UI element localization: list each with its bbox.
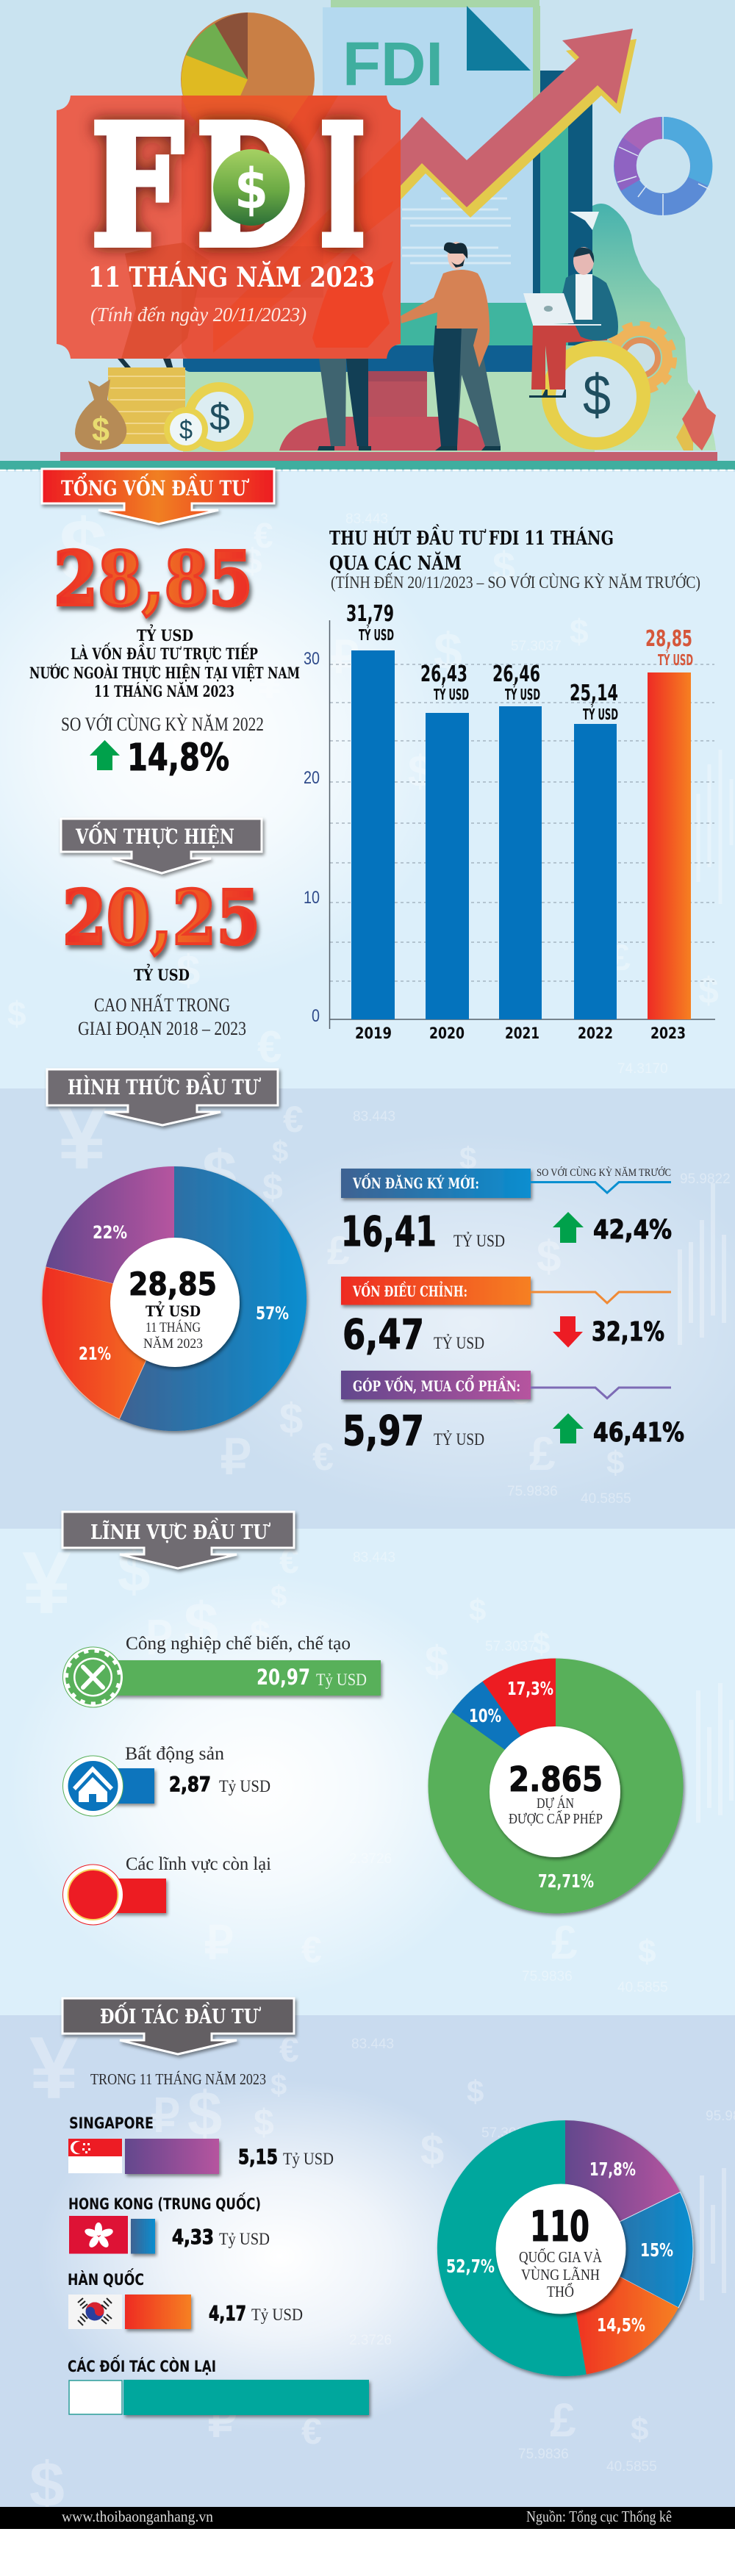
text block: total capital description: LÀ VỐN ĐẦU TƯ TRỰC TIẾP: [71, 643, 258, 663]
panel: new registered capital: [341, 1166, 672, 1256]
bar: manufacturing: [63, 1634, 381, 1707]
bar 2020: TỶ USD: [434, 685, 469, 703]
bar: manufacturing: 20,97: [257, 1665, 310, 1690]
panel: section 3 background: €: [279, 1542, 299, 1581]
panel: section 4 background: $: [420, 2126, 444, 2174]
panel: section 1 background: $: [698, 970, 719, 1011]
panel: capital contribution: [341, 1371, 684, 1455]
heading: chart title: THU HÚT ĐẦU TƯ FDI 11 THÁNG: [329, 524, 614, 550]
donut chart: investment forms: 22%: [93, 1222, 127, 1243]
panel: section 1 background: €: [257, 1022, 282, 1072]
ribbon: VỐN THỰC HIỆN: VỐN THỰC HIỆN: [75, 822, 234, 849]
heading: chart title: [329, 524, 700, 592]
icon: red circle: [63, 1865, 123, 1925]
text block: total capital description: [29, 624, 300, 735]
donut centre: 110: [530, 2203, 589, 2251]
bar: Hong Kong: Tỷ USD: [219, 2230, 270, 2248]
panel: section 1 background: 83.443: [345, 512, 388, 527]
icon: flag of Singapore: [68, 2139, 122, 2173]
ribbon: LĨNH VỰC ĐẦU TƯ: [62, 1512, 294, 1568]
icon: person partly hidden by title: [118, 358, 371, 451]
panel: section 3 background: $: [184, 1590, 218, 1660]
icon: house: [63, 1756, 123, 1816]
panel: section 1 background: $: [7, 994, 26, 1033]
bar 2020: 26,43: [420, 661, 467, 687]
bar: manufacturing: Công nghiệp chế biến, chế tạo: [126, 1634, 351, 1654]
panel: section 2 background: 83.443: [353, 1109, 395, 1124]
slice: manufacturing 72,71%: [428, 1658, 684, 1914]
panel: capital contribution: TỶ USD: [434, 1430, 484, 1449]
bar: Singapore: Tỷ USD: [283, 2150, 334, 2168]
panel: section 1 background: $: [408, 747, 432, 796]
icon: money bag and coins: $: [92, 410, 110, 448]
panel: new registered capital: TỶ USD: [453, 1232, 505, 1250]
panel: section 4 background: 75.9836: [518, 2447, 569, 2462]
text block: realized capital description: GIAI ĐOẠN 2018 – 2023: [78, 1018, 246, 1039]
panel: new registered capital: SO VỚI CÙNG KỲ NĂM TRƯỚC: [537, 1166, 671, 1179]
panel: section 4 background: $: [467, 2074, 484, 2109]
panel: section 3 background: $: [425, 1637, 448, 1685]
slice: other 17,3%: [482, 1658, 556, 1786]
y axis labels: 30: [304, 649, 320, 669]
donut centre: 28,85: [129, 1266, 217, 1303]
bar: Hong Kong: 4,33: [172, 2225, 214, 2249]
panel: section 4 background: ₽: [208, 2396, 237, 2447]
icon: flag of Hong Kong: [69, 2216, 128, 2253]
panel: section 1 background: $: [243, 542, 262, 581]
panel: section 4 background: $: [29, 2450, 65, 2520]
donut chart: projects by sector: 17,3%: [507, 1678, 553, 1699]
donut centre: [495, 2184, 626, 2314]
icon: standing man: [401, 242, 501, 451]
donut chart: projects by sector: 72,71%: [538, 1870, 594, 1892]
icon: green dollar coin: $: [234, 156, 268, 221]
ribbon: HÌNH THỨC ĐẦU TƯ: HÌNH THỨC ĐẦU TƯ: [68, 1072, 261, 1099]
donut centre: THỔ: [547, 2283, 574, 2300]
bar 2023: TỶ USD: [658, 650, 693, 669]
bar 2023: [645, 626, 693, 1042]
donut chart: investment forms: 57%: [256, 1303, 289, 1324]
donut centre: [490, 1726, 620, 1857]
panel: section 4 background: $: [254, 2102, 274, 2143]
bar: other sectors: Các lĩnh vực còn lại: [126, 1854, 271, 1874]
bar: real estate: Bất động sản: [125, 1744, 225, 1764]
panel: section 2 background: 40.5855: [581, 1491, 631, 1507]
icon: donut chart illustration: [617, 117, 710, 216]
bar: other partners: CÁC ĐỐI TÁC CÒN LẠI: [68, 2355, 216, 2375]
panel: section 1 background: $: [59, 501, 108, 600]
bar: real estate: Tỷ USD: [219, 1777, 270, 1795]
text block: total capital description: NƯỚC NGOÀI THỰC HIỆN TẠI VIỆT NAM: [29, 664, 300, 682]
panel: section 2 background: $: [202, 1138, 237, 1208]
donut centre: QUỐC GIA VÀ: [519, 2248, 603, 2266]
donut chart: investment forms: 21%: [79, 1343, 111, 1364]
panel: section 1 background: €: [254, 517, 273, 556]
heading: FDI: D: [196, 87, 308, 284]
panel: new registered capital: VỐN ĐĂNG KÝ MỚI:: [352, 1172, 479, 1192]
bar: South Korea: HÀN QUỐC: [68, 2268, 144, 2289]
ribbon: HÌNH THỨC ĐẦU TƯ: [47, 1069, 278, 1125]
panel: section 2 background: €: [507, 1364, 531, 1413]
bar 2019: TỶ USD: [359, 625, 394, 644]
panel: adjusted capital: [341, 1277, 671, 1359]
ribbon: TỔNG VỐN ĐẦU TƯ: TỔNG VỐN ĐẦU TƯ: [61, 472, 250, 501]
panel: section 2 background: $: [279, 1395, 303, 1443]
bar: Singapore: 5,15: [238, 2145, 278, 2169]
donut chart: partners: 14,5%: [597, 2314, 645, 2336]
panel: section 4 background: [0, 2015, 735, 2520]
bar: South Korea: 4,17: [209, 2301, 246, 2325]
footer: Nguồn: Tổng cục Thống kê: [526, 2508, 672, 2525]
panel: section 2 background: $: [537, 1232, 561, 1281]
panel: section 2 background: $: [272, 1135, 288, 1168]
slice: Singapore 17,8%: [565, 2120, 680, 2248]
panel: section 2 background: [0, 1088, 735, 1529]
panel: new registered capital: 16,41: [341, 1208, 437, 1256]
slice: others 52,7%: [437, 2120, 587, 2376]
panel: section 3 background: $: [270, 1580, 287, 1612]
panel: section 3 background: 57.3037: [485, 1639, 536, 1654]
panel: section 4 background: $: [631, 2411, 648, 2447]
icon: big dollar coin: $: [583, 362, 611, 427]
icon: money bag and coins: $: [179, 415, 193, 445]
panel: section 3 background: 83.443: [353, 1550, 395, 1565]
bar 2020: [420, 661, 469, 1042]
bar 2023: 2023: [650, 1025, 686, 1042]
panel: section 4 background: €: [279, 2031, 299, 2070]
icon: sitting person with laptop: [523, 247, 618, 398]
panel: adjusted capital: 32,1%: [592, 1317, 664, 1347]
footer: www.thoibaonganhang.vn: [62, 2508, 213, 2525]
icon: green dollar coin: [213, 149, 290, 226]
panel: section 1 background: $: [570, 612, 589, 650]
y axis labels: 20: [304, 768, 320, 788]
bar 2022: TỶ USD: [583, 705, 618, 723]
icon: green up arrow: [90, 740, 120, 770]
heading: FDI: F: [90, 87, 184, 284]
bar: Singapore: [68, 2114, 334, 2174]
panel: section 4 background: £: [550, 2394, 576, 2447]
panel: section 2 background: $: [606, 1445, 624, 1481]
ribbon: ĐỐI TÁC ĐẦU TƯ: [62, 1998, 294, 2054]
heading: chart title: QUA CÁC NĂM: [329, 551, 462, 575]
bar 2022: 2022: [578, 1025, 613, 1042]
panel: section 3 background: ₽: [143, 1613, 172, 1664]
bar: Hong Kong: HONG KONG (TRUNG QUỐC): [68, 2192, 261, 2213]
bar: South Korea: [68, 2268, 303, 2329]
panel: section 2 background: €: [283, 1099, 304, 1140]
big number: 28,85: 28,85: [54, 535, 253, 623]
ribbon: VỐN THỰC HIỆN: [61, 819, 262, 873]
date note: (Tính đến ngày 20/11/2023): [90, 304, 306, 326]
panel: adjusted capital: TỶ USD: [434, 1334, 484, 1352]
subtitle: 11 THÁNG NĂM 2023: [88, 261, 375, 293]
panel: capital contribution: GÓP VỐN, MUA CỔ PHẦN:: [353, 1374, 520, 1395]
slice: Hong Kong 15%: [565, 2192, 693, 2308]
panel: section 3 background: $: [533, 1626, 550, 1660]
donut centre: [110, 1238, 240, 1367]
donut centre: DỰ ÁN: [537, 1795, 574, 1812]
big number: 20,25: 20,25: [62, 874, 260, 961]
panel: section 3 background: [0, 1529, 735, 2015]
panel: section 1 background: $: [434, 623, 462, 680]
panel: section 2 background: €: [312, 1436, 334, 1479]
panel: section 3 background: $: [250, 1613, 270, 1654]
bar 2022: 25,14: [570, 681, 618, 706]
ground bar: [0, 452, 735, 470]
icon: paper plane: [570, 212, 599, 230]
panel: section 4 background: 57.3037: [481, 2125, 532, 2141]
donut chart: investment forms: [42, 1166, 306, 1431]
bar: manufacturing: Tỷ USD: [316, 1671, 367, 1689]
ribbon: TỔNG VỐN ĐẦU TƯ: [42, 469, 274, 524]
heading: FDI: [90, 87, 366, 284]
panel: section 2 background: ¥: [57, 1089, 107, 1188]
donut chart: partners: 17,8%: [589, 2159, 636, 2180]
slice: South Korea 14,5%: [565, 2248, 678, 2375]
text block: realized capital description: TỶ USD: [134, 964, 190, 984]
icon: big dollar coin: [542, 341, 650, 450]
donut chart: projects by sector: 10%: [469, 1705, 501, 1726]
panel: section 2 background: $: [459, 1141, 476, 1175]
donut chart: partners: 15%: [640, 2239, 673, 2261]
panel: section 2 background: 75.9836: [507, 1484, 558, 1499]
bar 2022: [570, 681, 618, 1042]
icon: computer monitor: [183, 71, 592, 451]
panel: section 2 background: £: [529, 1427, 556, 1480]
document title: FDI: [343, 29, 443, 98]
bar: other partners: [68, 2355, 369, 2415]
bar: other sectors: [63, 1854, 271, 1925]
slice: new registered 57%: [119, 1166, 306, 1431]
slice: real estate 10%: [452, 1682, 556, 1786]
bar 2021: 2021: [505, 1025, 539, 1042]
panel: section 3 background: $: [638, 1934, 656, 1970]
text block: total capital description: 11 THÁNG NĂM 2023: [94, 682, 234, 700]
footer: [0, 2507, 735, 2529]
donut chart: projects by sector: [428, 1658, 684, 1914]
donut centre: 2.865: [509, 1759, 603, 1799]
bar: Hong Kong: [68, 2192, 270, 2253]
panel: section 1 background: [0, 472, 735, 1088]
panel: adjusted capital: VỐN ĐIỀU CHỈNH:: [352, 1280, 467, 1300]
ribbon: ĐỐI TÁC ĐẦU TƯ: ĐỐI TÁC ĐẦU TƯ: [100, 2001, 261, 2028]
panel: section 3 background: ₽: [204, 1918, 233, 1969]
icon: FDI document: [323, 6, 533, 303]
panel: section 1 background: £: [610, 937, 631, 978]
bar 2020: 2020: [429, 1025, 465, 1042]
panel: section 4 background: $: [270, 2069, 287, 2101]
note: period: TRONG 11 THÁNG NĂM 2023: [90, 2070, 266, 2088]
bar 2019: [346, 601, 395, 1042]
panel: section 1 background: ₽: [331, 633, 359, 682]
donut chart: partners: [437, 2120, 693, 2376]
panel: section 4 background: $: [187, 2079, 222, 2149]
growth 14,8%: 14,8%: [127, 736, 229, 780]
bar 2021: 26,46: [492, 661, 540, 687]
panel: section 3 background: 40.5855: [617, 1980, 668, 1995]
y axis labels: [304, 649, 320, 1026]
panel: section 4 background: 2.3726: [349, 2333, 392, 2348]
panel: header illustration background: [0, 0, 735, 472]
heading: FDI: I: [319, 87, 366, 284]
bar 2021: TỶ USD: [505, 685, 540, 703]
icon: rising arrow: [368, 29, 637, 231]
bar 2019: 2019: [355, 1025, 392, 1042]
icon: gear with tools: [63, 1647, 123, 1707]
bar: real estate: 2,87: [169, 1772, 211, 1796]
donut chart: partners: 52,7%: [446, 2256, 495, 2277]
bar: real estate: [63, 1744, 270, 1816]
panel: new registered capital: 42,4%: [593, 1215, 672, 1245]
panel: section 2 background: £: [327, 1227, 350, 1273]
panel: section 3 background: 75.9836: [522, 1969, 573, 1984]
panel: section 3 background: 2.3726: [349, 1851, 392, 1867]
panel: section 4 background: ¥: [29, 2019, 79, 2117]
panel: section 4 background: 40.5855: [606, 2459, 657, 2475]
y axis labels: 0: [312, 1006, 320, 1026]
text block: total capital description: TỶ USD: [137, 624, 193, 645]
bar: South Korea: Tỷ USD: [251, 2306, 303, 2324]
panel: section 1 background: ¥: [257, 659, 282, 708]
panel: section 1 background: 57.3037: [511, 639, 562, 654]
panel: section 4 background: ₽: [151, 2091, 179, 2142]
bar chart: FDI by year: [304, 601, 715, 1042]
bar 2023: 28,85: [645, 626, 692, 652]
panel: section 4 background: €: [301, 2411, 322, 2452]
panel: section 2 background: $: [262, 1166, 283, 1208]
donut centre: NĂM 2023: [143, 1336, 203, 1352]
bar 2021: [492, 661, 542, 1042]
icon: autumn leaves: [676, 390, 716, 451]
panel: capital contribution: 5,97: [343, 1407, 424, 1455]
panel: section 3 background: £: [551, 1916, 578, 1969]
y axis labels: 10: [304, 888, 320, 908]
icon: pie chart illustration: [181, 12, 315, 146]
slice: adjusted 21%: [42, 1267, 174, 1419]
text block: realized capital description: [78, 964, 246, 1039]
slice: capital contribution 22%: [46, 1166, 174, 1299]
bar 2019: 31,79: [346, 601, 394, 627]
panel: title box: [57, 87, 404, 360]
panel: adjusted capital: 6,47: [343, 1311, 424, 1359]
text block: realized capital description: CAO NHẤT TRONG: [94, 994, 230, 1016]
text block: total capital description: SO VỚI CÙNG KỲ NĂM 2022: [61, 714, 264, 735]
panel: section 2 background: ₽: [220, 1430, 251, 1484]
bar: Singapore: SINGAPORE: [69, 2114, 154, 2132]
panel: section 4 background: 83.443: [351, 2037, 394, 2052]
panel: capital contribution: 46,41%: [593, 1418, 684, 1448]
donut centre: ĐƯỢC CẤP PHÉP: [509, 1809, 603, 1827]
panel: section 3 background: $: [469, 1593, 486, 1627]
panel: section 3 background: €: [301, 1929, 322, 1970]
icon: money bag and coins: [75, 367, 254, 451]
panel: section 1 background: 74.3170: [617, 1061, 668, 1077]
icon: gear: [606, 324, 674, 392]
donut centre: VÙNG LÃNH: [521, 2266, 600, 2283]
icon: flag of South Korea: [68, 2295, 122, 2329]
panel: section 3 background: $: [118, 1538, 150, 1604]
panel: section 1 background: $: [492, 543, 515, 589]
panel: section 3 background: ¥: [22, 1534, 71, 1632]
panel: section 2 background: 95.9822: [680, 1172, 731, 1187]
panel: section 1 background: $: [176, 947, 200, 994]
ribbon: LĨNH VỰC ĐẦU TƯ: LĨNH VỰC ĐẦU TƯ: [90, 1517, 271, 1544]
icon: money bag and coins: $: [209, 396, 230, 439]
donut centre: TỶ USD: [146, 1299, 201, 1320]
donut centre: 11 THÁNG: [146, 1319, 201, 1335]
